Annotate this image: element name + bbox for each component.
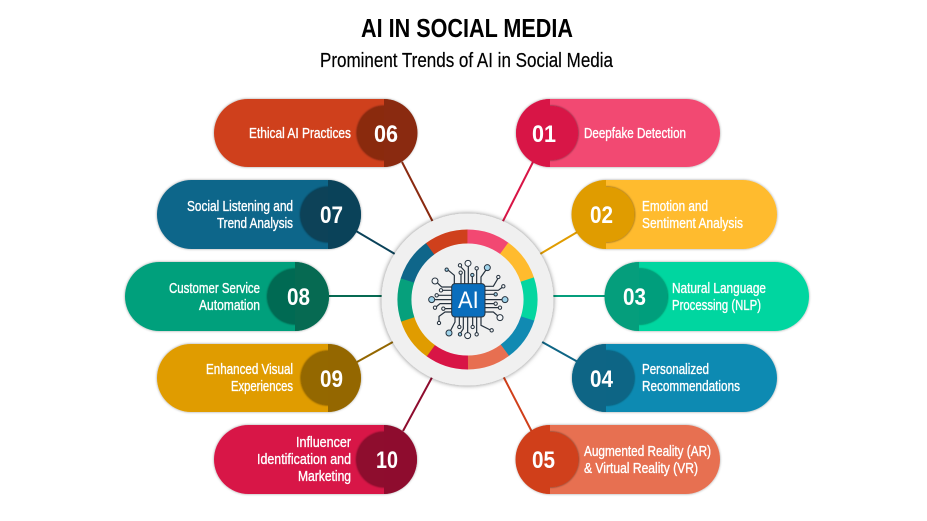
panel: 04 Personalized Recommendations: Personalized [642, 362, 709, 378]
panel: 04 Personalized Recommendations: 04 [590, 366, 613, 393]
panel: 10 Influencer Identification and Marketing: Influencer [296, 435, 351, 451]
panel: 02 Emotion and Sentiment Analysis [572, 180, 777, 249]
panel: 10 Influencer Identification and Marketing: Identification and [257, 452, 351, 468]
panel: 03 Natural Language Processing: Processing (NLP) [672, 298, 761, 314]
panel: 09 Enhanced Visual Experiences: Experiences [231, 379, 293, 395]
panel: 02 Emotion and Sentiment Analysis: 02 [590, 202, 613, 229]
panel: 10 Influencer Identification and Marketing: 10 [376, 447, 398, 474]
panel: 05 Augmented and Virtual Reality: & Virtual Reality (VR) [584, 461, 698, 477]
panel: 08 Customer Service Automation: 08 [287, 284, 310, 311]
panel: 10 Influencer Identification and Marketing: Marketing [298, 469, 351, 485]
panel: 05 Augmented and Virtual Reality: 05 [532, 447, 555, 474]
panel: 01 Deepfake Detection: Deepfake Detection [584, 126, 686, 142]
panel: 02 Emotion and Sentiment Analysis: Emotion and [642, 199, 708, 215]
connector lines [328, 162, 606, 432]
panel: 04 Personalized Recommendations: Recommendations [642, 379, 740, 395]
segmented ring [380, 212, 555, 387]
panel: 03 Natural Language Processing: 03 [623, 284, 646, 311]
panel: 07 Social Listening and Trend Analysis: 07 [320, 202, 343, 229]
panel: 05 Augmented and Virtual Reality [516, 425, 720, 494]
central hub [380, 212, 555, 387]
panel: 06 Ethical AI Practices [214, 99, 418, 167]
icon: AI chip: AI [458, 287, 479, 314]
panel: 03 Natural Language Processing [604, 262, 809, 331]
panel: 04 Personalized Recommendations [572, 344, 777, 412]
panel: 01 Deepfake Detection: 01 [532, 121, 556, 148]
panel: 01 Deepfake Detection [516, 99, 720, 167]
title: AI IN SOCIAL MEDIA [361, 13, 573, 43]
panel: 06 Ethical AI Practices: 06 [374, 121, 398, 148]
panel: 08 Customer Service Automation [125, 262, 329, 331]
panel: 03 Natural Language Processing: Natural Language [672, 281, 766, 297]
panel: 07 Social Listening and Trend Analysis [157, 180, 361, 249]
panel: 09 Enhanced Visual Experiences: 09 [320, 366, 343, 393]
subtitle: Prominent Trends of AI in Social Media [320, 50, 614, 72]
panel: 10 Influencer Identification and Marketing [214, 425, 417, 494]
panel: 07 Social Listening and Trend Analysis: Social Listening and [187, 199, 293, 215]
panel: 02 Emotion and Sentiment Analysis: Sentiment Analysis [642, 216, 743, 232]
icon: AI chip [429, 260, 508, 339]
panel: 06 Ethical AI Practices: Ethical AI Practices [249, 126, 351, 142]
panel: 09 Enhanced Visual Experiences: Enhanced Visual [206, 362, 293, 378]
panel: 08 Customer Service Automation: Automation [199, 298, 260, 314]
panel: 05 Augmented and Virtual Reality: Augmented Reality (AR) [584, 444, 711, 460]
panel: 09 Enhanced Visual Experiences [157, 344, 361, 412]
panel: 07 Social Listening and Trend Analysis: Trend Analysis [217, 216, 293, 232]
panel: 08 Customer Service Automation: Customer Service [169, 281, 260, 297]
